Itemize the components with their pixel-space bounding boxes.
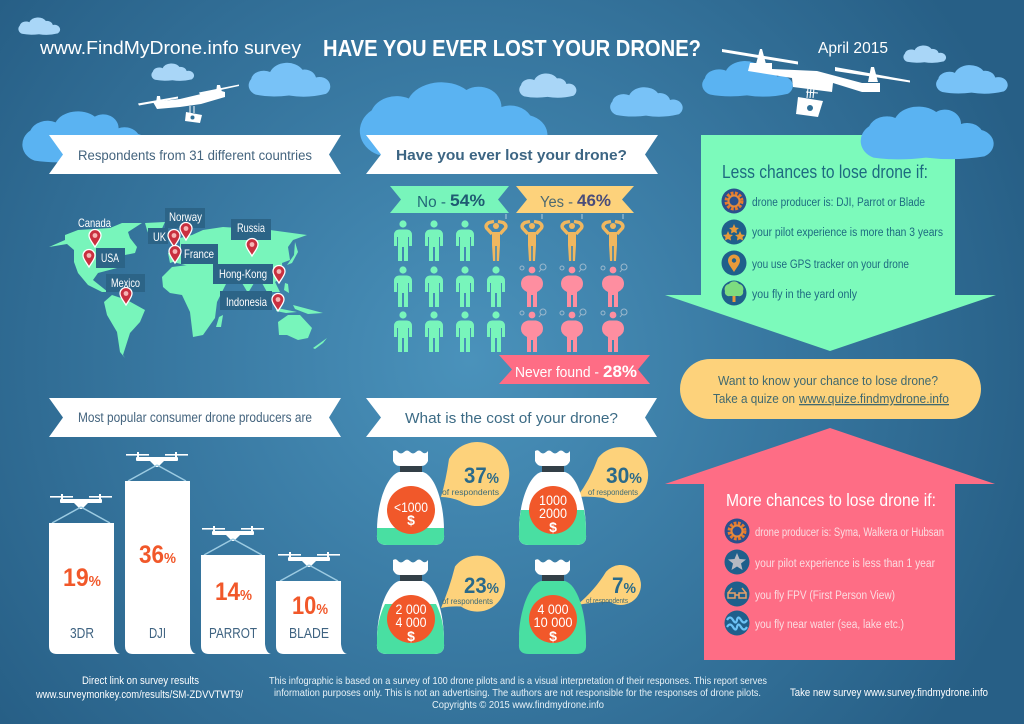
ribbon: Yes 46%: Yes - bbox=[540, 194, 573, 211]
footer: survey link: Direct link on survey results bbox=[82, 675, 199, 687]
cloud: over green arrow bbox=[861, 107, 994, 159]
ribbon: never found 28% bbox=[499, 355, 650, 384]
callout: quiz bbox=[680, 359, 981, 419]
footer: survey link: www.surveymonkey.com/results/SM-ZDVVTWT9/ bbox=[35, 689, 244, 701]
ribbon: No 54%: No - bbox=[417, 194, 446, 211]
panel: more chances arrow bbox=[665, 428, 995, 660]
group: lost and found, orange bbox=[486, 214, 623, 261]
panel: lost your drone ribbon: Have you ever lost your drone? bbox=[396, 147, 627, 164]
callout: 7% bbox=[577, 565, 641, 605]
money bag: 1000 to 2000: 1000 bbox=[539, 492, 567, 508]
panel: more chances arrow: More chances to lose drone if: bbox=[726, 490, 936, 510]
label: Indonesia bbox=[220, 291, 272, 310]
money bag: 4000 to 10000: 10 000 bbox=[534, 614, 573, 630]
cloud: by date bbox=[903, 45, 946, 63]
panel: world map bbox=[49, 208, 327, 358]
map continents bbox=[49, 222, 327, 358]
money bag: 2000 to 4000: 4 000 bbox=[396, 614, 427, 630]
label: Norway bbox=[165, 208, 205, 228]
callout: 37%: 37% bbox=[464, 463, 499, 488]
panel: respondents ribbon bbox=[49, 135, 341, 174]
group: never found, pink bbox=[520, 264, 627, 352]
chart: producer bars bbox=[49, 452, 347, 654]
bar: BLADE 10%: 10% bbox=[292, 592, 328, 620]
money bag: 2000 to 4000: 2 000 bbox=[396, 601, 427, 617]
date: April 2015 bbox=[818, 40, 888, 57]
callout: 30%: of respondents bbox=[588, 488, 638, 497]
money bag: 4000 to 10000: 4 000 bbox=[538, 601, 569, 617]
money bag: under 1000: $ bbox=[407, 512, 415, 528]
callout: 7%: of respondents bbox=[586, 598, 628, 605]
label: France: France bbox=[184, 247, 214, 261]
title: HAVE YOU EVER LOST YOUR DRONE? bbox=[323, 35, 701, 61]
callout: 37% bbox=[441, 442, 509, 506]
item: producer: drone producer is: DJI, Parrot or Blade bbox=[752, 197, 925, 209]
icon: large drone with box bbox=[722, 49, 910, 117]
money bag: 1000 to 2000: 2000 bbox=[539, 505, 567, 521]
item: experience: your pilot experience is less than 1 year bbox=[755, 558, 935, 570]
money bag: under 1000 bbox=[377, 450, 444, 545]
panel: less chances arrow bbox=[665, 107, 996, 351]
ribbon: never found 28%: 28% bbox=[603, 363, 637, 381]
panel: cost ribbon: What is the cost of your drone? bbox=[405, 410, 618, 427]
label: Mexico: Mexico bbox=[111, 276, 140, 290]
callout: 30% bbox=[577, 447, 648, 503]
label: Russia: Russia bbox=[237, 221, 265, 235]
item: FPV: you fly FPV (First Person View) bbox=[755, 590, 895, 602]
icon: tree bbox=[722, 280, 746, 306]
money bag: 4000 to 10000: $ bbox=[549, 628, 557, 644]
bar: 3DR 19%: 19% bbox=[63, 564, 101, 592]
label: Indonesia: Indonesia bbox=[226, 295, 267, 309]
money bag: 1000 to 2000 bbox=[519, 450, 586, 545]
cloud: near first drone bbox=[249, 63, 330, 97]
ribbon: Yes 46%: 46% bbox=[577, 191, 611, 210]
icon: gear bbox=[724, 518, 750, 544]
map pins bbox=[83, 222, 285, 311]
icon: water waves bbox=[724, 610, 750, 636]
icon: FPV goggles bbox=[724, 582, 750, 606]
icon: small drone with box bbox=[138, 84, 239, 123]
cloud: left behind ribbon bbox=[22, 111, 150, 162]
money bag: 2000 to 4000: $ bbox=[407, 628, 415, 644]
cloud: top centre small bbox=[519, 73, 576, 98]
bar: PARROT 14% bbox=[201, 526, 271, 654]
callout: 23% bbox=[441, 556, 505, 612]
callout: 7%: 7% bbox=[612, 573, 636, 598]
label: UK: UK bbox=[153, 230, 166, 244]
item: GPS: you use GPS tracker on your drone bbox=[752, 259, 909, 271]
panel: lost your drone ribbon bbox=[366, 135, 658, 174]
footer: disclaimer: This infographic is based on a survey of 100 drone pilots and is a visual interpretation of their responses. This report serves bbox=[269, 675, 767, 687]
panel: respondents ribbon: Respondents from 31 different countries bbox=[78, 148, 312, 163]
footer: disclaimer bbox=[269, 675, 767, 711]
cloud: big centre bbox=[360, 82, 547, 157]
label: Canada: Canada bbox=[78, 216, 111, 230]
icon: stars bbox=[722, 220, 746, 244]
chart: people pictogram bbox=[394, 214, 627, 352]
ribbon: No 54% bbox=[390, 186, 509, 213]
bar: PARROT 14%: 14% bbox=[215, 578, 252, 606]
panel: less chances arrow: Less chances to lose drone if: bbox=[722, 162, 928, 182]
footer: new survey link: Take new survey www.survey.findmydrone.info bbox=[790, 687, 988, 699]
bar: BLADE 10% bbox=[276, 552, 347, 654]
cloud: behind large drone bbox=[702, 61, 793, 97]
cloud: top centre medium bbox=[610, 87, 683, 117]
panel: producers ribbon: Most popular consumer drone producers are bbox=[78, 410, 312, 425]
money bag: under 1000: <1000 bbox=[394, 499, 428, 515]
bar: BLADE 10%: BLADE bbox=[289, 625, 329, 642]
callout: 30%: 30% bbox=[606, 463, 642, 488]
money bag: 2000 to 4000 bbox=[377, 559, 444, 654]
bar: 3DR 19%: 3DR bbox=[70, 625, 94, 642]
footer: disclaimer: information purposes only. This is not an advertising. The authors are not responsible for the responses of drone pilots. bbox=[274, 687, 761, 699]
label: Hong-Kong bbox=[213, 264, 273, 284]
label: Mexico bbox=[106, 274, 145, 292]
ribbon: never found 28%: Never found - bbox=[515, 365, 599, 381]
label: Hong-Kong: Hong-Kong bbox=[219, 267, 267, 281]
label: USA: USA bbox=[101, 251, 119, 265]
cloud: top right bbox=[936, 65, 1008, 94]
item: experience: your pilot experience is more than 3 years bbox=[752, 227, 943, 239]
callout: 37%: of respondents bbox=[442, 487, 499, 497]
item: producer: drone producer is: Syma, Walkera or Hubsan bbox=[755, 527, 944, 539]
cloud: top left small bbox=[18, 17, 60, 35]
ribbon: No 54%: 54% bbox=[450, 191, 485, 210]
item: yard: you fly in the yard only bbox=[752, 289, 857, 301]
icon: star bbox=[724, 550, 750, 574]
callout: 23%: of respondents bbox=[442, 597, 493, 606]
bar: PARROT 14%: PARROT bbox=[209, 625, 257, 642]
icon: gear bbox=[722, 188, 746, 214]
item: water: you fly near water (sea, lake etc.) bbox=[755, 619, 904, 631]
label: UK bbox=[148, 228, 168, 244]
footer: disclaimer: Copyrights © 2015 www.findmydrone.info bbox=[432, 699, 604, 711]
label: Norway: Norway bbox=[169, 210, 202, 224]
callout: 23%: 23% bbox=[464, 573, 499, 598]
cloud: under survey text bbox=[151, 63, 194, 81]
group: found or never lost, green bbox=[394, 220, 505, 352]
money bag: 4000 to 10000 bbox=[519, 559, 586, 654]
ribbon: Yes 46% bbox=[516, 186, 634, 213]
panel: cost ribbon bbox=[366, 398, 657, 437]
callout: quiz: Want to know your chance to lose drone? bbox=[718, 373, 938, 388]
header: survey site: www.FindMyDrone.info survey bbox=[39, 38, 301, 58]
bar: DJI 36%: 36% bbox=[139, 541, 176, 569]
bar: 3DR 19% bbox=[49, 494, 120, 654]
footer: survey link bbox=[35, 675, 244, 701]
icon: GPS marker bbox=[722, 250, 746, 276]
label: France bbox=[181, 244, 218, 264]
callout: quiz: Take a quize on bbox=[713, 391, 795, 406]
label: USA bbox=[96, 248, 125, 268]
bar: DJI 36%: DJI bbox=[149, 625, 166, 642]
money bag: 1000 to 2000: $ bbox=[549, 519, 557, 535]
panel: producers ribbon bbox=[49, 398, 341, 437]
bar: DJI 36% bbox=[125, 452, 196, 654]
callout: quiz: www.quize.findmydrone.info bbox=[798, 391, 949, 406]
label: Russia bbox=[231, 219, 271, 240]
